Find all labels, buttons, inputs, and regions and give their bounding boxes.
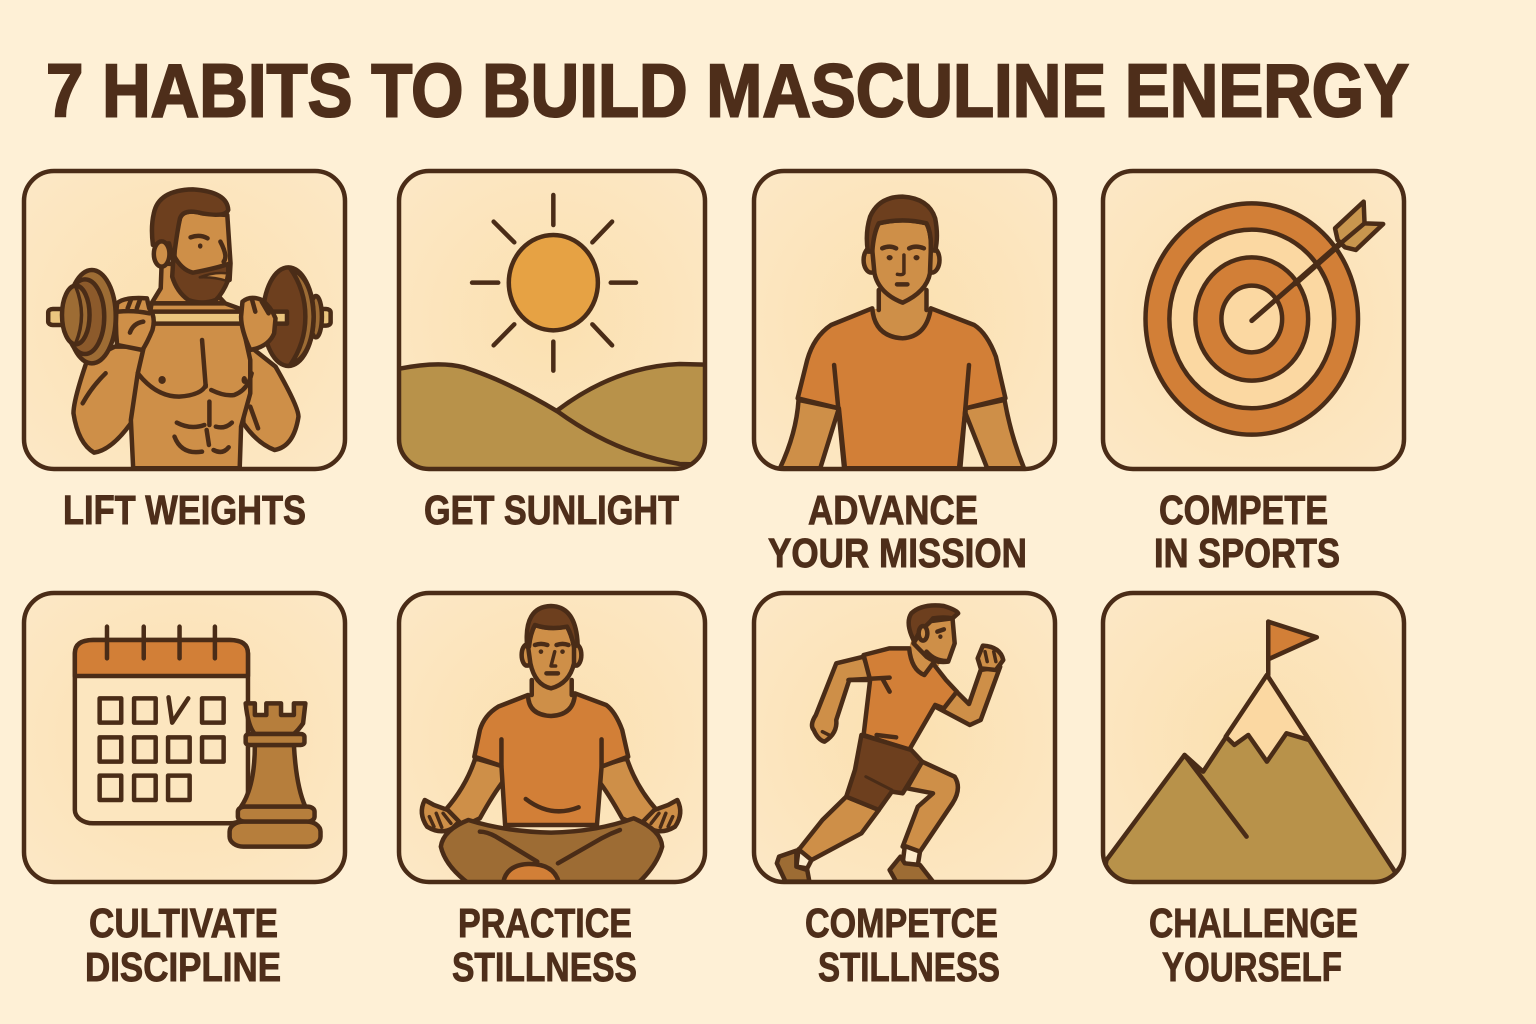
icon: meditating man — [422, 606, 680, 885]
panel border — [399, 171, 705, 469]
panel border — [24, 593, 345, 882]
icon: calendar and chess rook — [75, 627, 321, 847]
icon: target with arrow — [1146, 202, 1383, 435]
panel border — [399, 593, 705, 882]
label: challenge yourself — [1149, 900, 1358, 990]
label: competce stillness: STILLNESS — [818, 944, 1000, 990]
icon: running man — [777, 605, 1003, 882]
label: practice stillness: PRACTICE — [458, 900, 632, 946]
icon: sun over hills — [401, 192, 703, 467]
label: lift weights: LIFT WEIGHTS — [63, 487, 306, 533]
label: cultivate discipline — [85, 900, 281, 990]
panel: get sunlight — [390, 171, 716, 480]
panel border — [1103, 171, 1404, 469]
panel: challenge yourself — [1102, 593, 1404, 885]
label: advance your mission — [768, 487, 1027, 576]
title: 7 HABITS TO BUILD MASCULINE ENERGY — [46, 48, 1409, 132]
icon: man in t-shirt — [780, 197, 1024, 468]
label: cultivate discipline: CULTIVATE — [89, 900, 278, 946]
label: practice stillness — [452, 900, 637, 990]
label: get sunlight: GET SUNLIGHT — [424, 487, 679, 533]
panel: cultivate discipline — [24, 593, 345, 882]
panel: advance your mission — [754, 171, 1055, 469]
icon: mountain with flag — [1102, 622, 1399, 885]
label: compete in sports: IN SPORTS — [1154, 530, 1340, 576]
panel: compete in sports — [1103, 171, 1404, 469]
panel border — [754, 593, 1055, 882]
label: competce stillness: COMPETCE — [805, 900, 998, 946]
panel border — [1103, 593, 1404, 882]
label: practice stillness: STILLNESS — [452, 944, 637, 990]
panel border — [24, 171, 345, 469]
label: advance your mission: YOUR MISSION — [768, 530, 1027, 576]
label: cultivate discipline: DISCIPLINE — [85, 944, 281, 990]
label: competce stillness — [805, 900, 1000, 990]
label: challenge yourself: YOURSELF — [1162, 944, 1342, 990]
panel: practice stillness — [399, 593, 705, 885]
label: compete in sports: COMPETE — [1159, 487, 1328, 533]
label: compete in sports — [1154, 487, 1340, 576]
icon: man lifting barbell — [48, 189, 331, 468]
label: challenge yourself: CHALLENGE — [1149, 900, 1358, 946]
panel: lift weights — [24, 171, 345, 469]
label: advance your mission: ADVANCE — [808, 487, 978, 533]
panel: competce stillness — [754, 593, 1055, 882]
panel border — [754, 171, 1055, 469]
